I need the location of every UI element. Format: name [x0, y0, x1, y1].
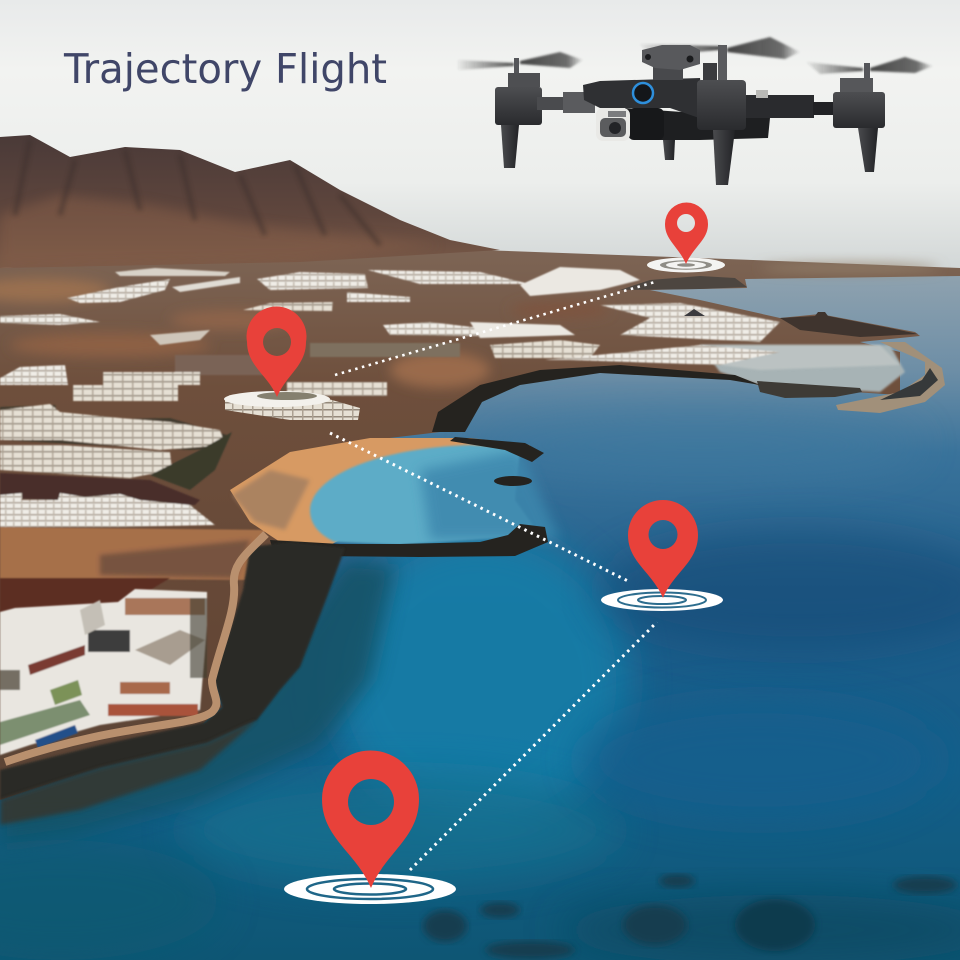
pin 2: town	[246, 307, 306, 397]
title: Trajectory Flight	[63, 45, 387, 93]
propellers	[458, 37, 933, 74]
gimbal camera	[628, 108, 664, 140]
town: far district	[0, 267, 780, 365]
lens with blue ring	[633, 83, 653, 103]
left arm	[537, 97, 565, 110]
harbour basin	[700, 345, 905, 392]
pin 3: bay	[601, 500, 723, 611]
coastal promenade	[5, 534, 266, 762]
town: foreground district	[0, 589, 207, 755]
pin 1: far	[647, 202, 725, 272]
right motor	[864, 63, 870, 79]
drone	[458, 37, 933, 185]
main body	[583, 78, 705, 120]
lower body	[625, 108, 770, 140]
resort ring building	[224, 391, 360, 420]
harbour boats	[700, 345, 900, 370]
far headland	[620, 276, 747, 290]
sky	[0, 0, 960, 280]
right arm	[746, 95, 814, 118]
jetties and rocks	[0, 365, 760, 825]
harbour breakwater	[836, 342, 945, 413]
land	[0, 250, 960, 800]
sea	[0, 275, 960, 960]
top module	[653, 66, 683, 80]
mountains	[0, 135, 500, 268]
left motor	[514, 58, 519, 74]
dotted route	[330, 282, 657, 870]
beach	[230, 438, 560, 545]
town: middle district	[0, 343, 460, 612]
pin 4: foreground	[284, 750, 456, 904]
castle headland	[780, 312, 918, 337]
roofed pavilion	[684, 309, 705, 316]
front right motor	[703, 63, 717, 83]
